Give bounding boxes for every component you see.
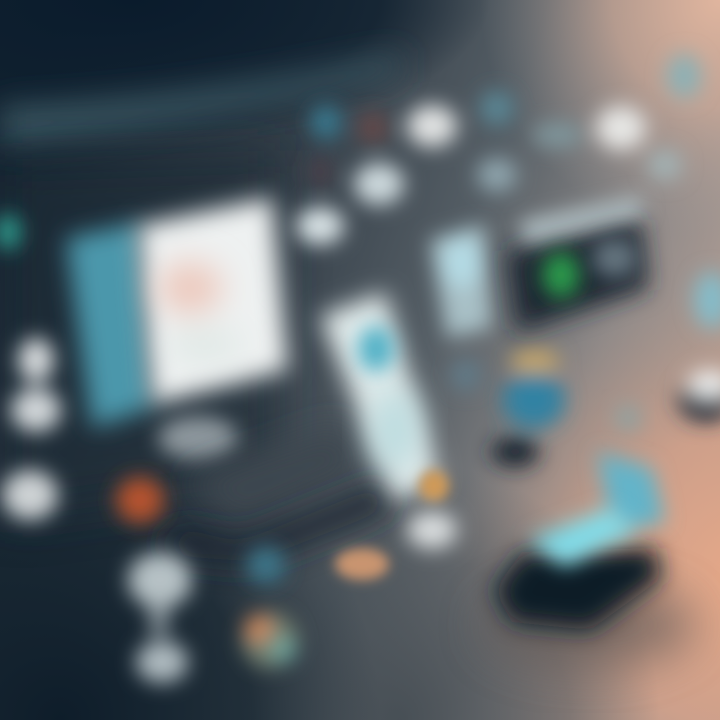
teal box device [494,405,665,630]
white blob below phone [407,511,457,549]
green screen [542,252,580,298]
multicolor badge icon [242,612,298,668]
robot figure [491,350,565,467]
device top edge [520,197,644,243]
dark left panel area [0,150,280,520]
screen chart [158,262,243,361]
phone [320,292,438,503]
icon: left edge symbols [0,214,61,520]
phone lower screen tint [371,388,419,472]
teal lid [598,452,665,532]
orange chip icon [116,477,164,523]
device dark base [494,548,662,630]
monitor screen [138,197,288,405]
orange badge near phone [419,470,449,502]
phone body [320,292,438,503]
dark shadow beneath keyboard [160,482,395,565]
small dot above [616,405,640,431]
right edge objects [678,272,720,422]
white trophy shape [128,552,192,683]
monitor side panel [66,222,152,428]
teal top [528,508,636,567]
keyboard [185,425,365,525]
tall device [430,224,492,391]
peach tag icon [335,548,389,580]
device body [507,218,648,332]
monitor [66,197,288,460]
curved teal band at top [0,55,400,144]
phone circle icon [358,326,394,372]
dark device with green screen [507,197,648,332]
blue dot icon [246,546,286,584]
side panel [592,238,638,278]
icon: scattered app bubbles [296,54,701,245]
soft shadow under teal device [485,585,695,665]
monitor stand [158,416,238,460]
